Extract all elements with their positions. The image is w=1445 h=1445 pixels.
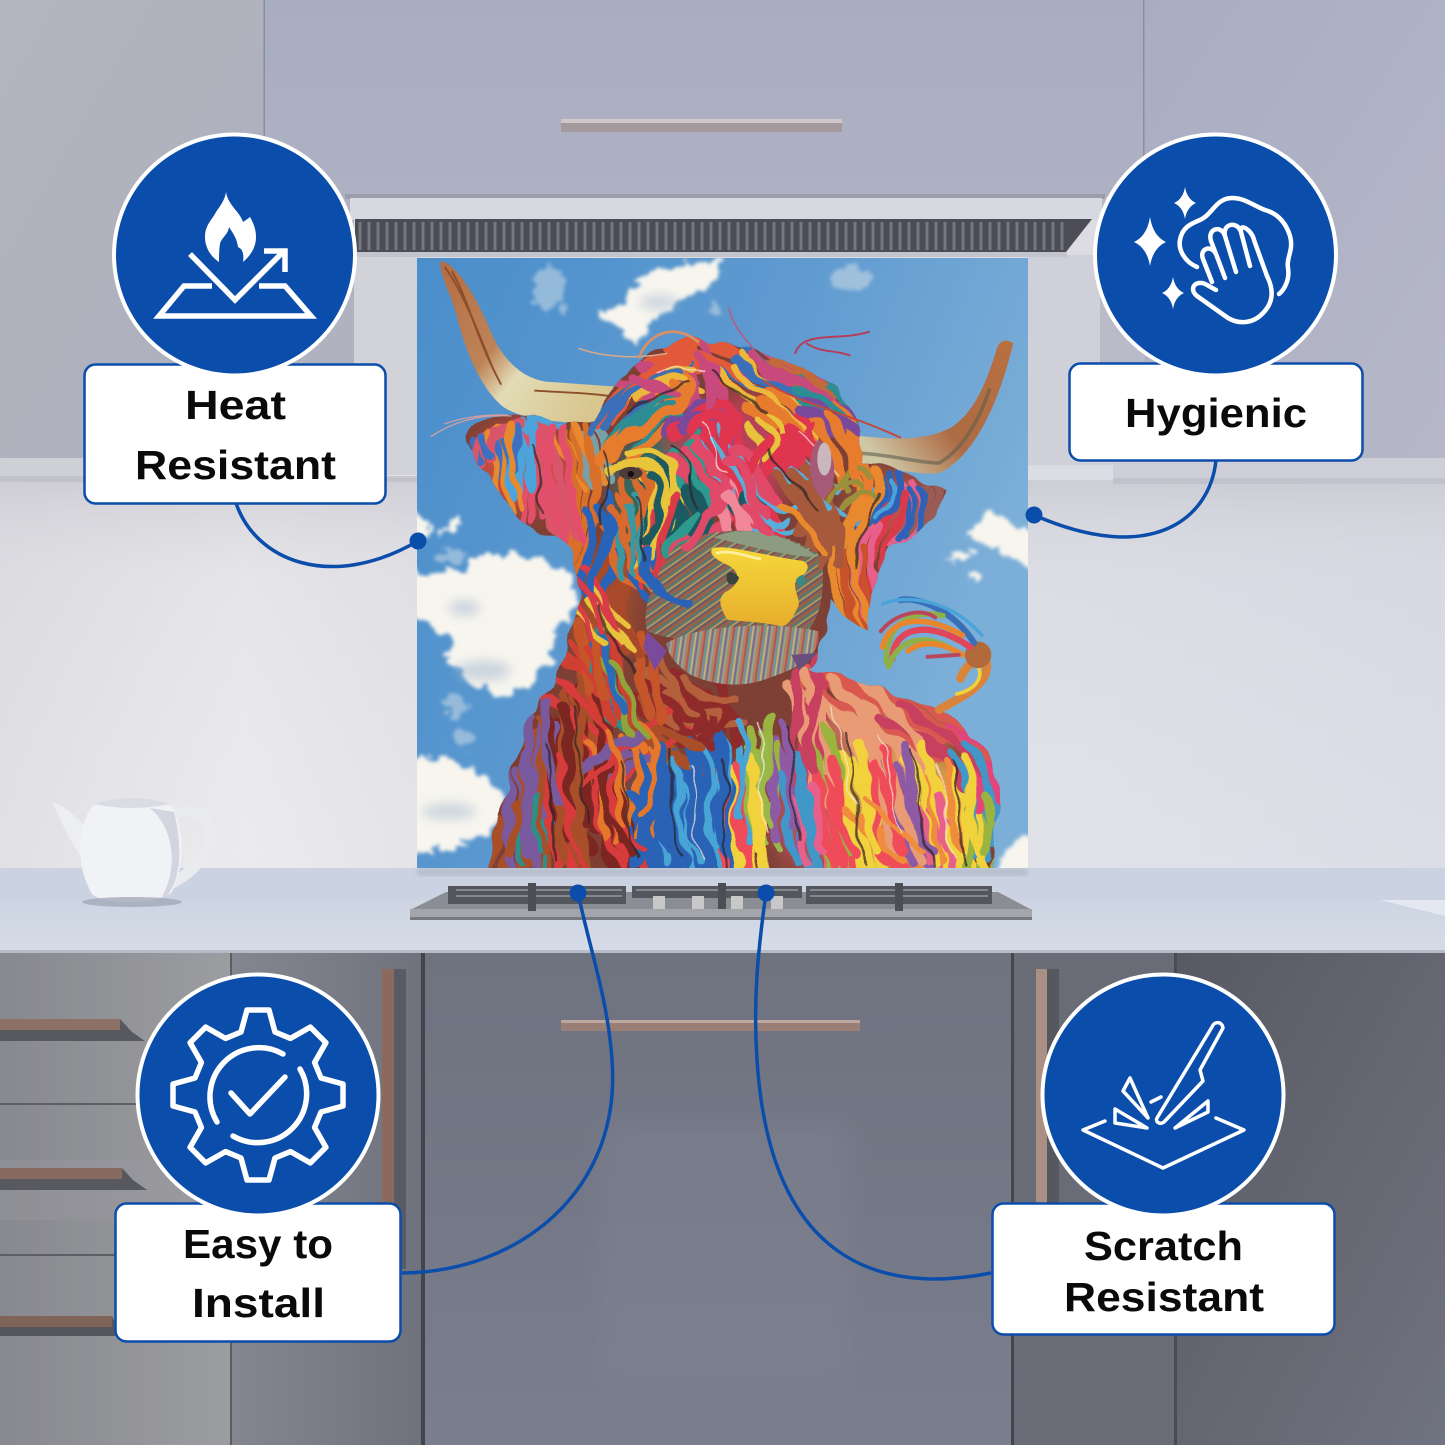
callout: easy to install [116,974,400,1342]
upper cabinets [0,0,1445,484]
icon: flame on surface with arrow [114,134,355,376]
callout: heat resistant [84,134,386,504]
neck ribbons [554,561,651,733]
cow stray hair and tips [431,308,900,438]
label: scratch resistant: Scratch [1084,1223,1243,1269]
light highlight strands [659,367,955,858]
cow muzzle [643,531,823,685]
label: easy to install [116,1204,400,1342]
cabinet handles: lower [0,969,1059,1336]
label: easy to install: Install [192,1280,325,1326]
label: hygienic [1070,364,1362,460]
cow eyes [619,440,834,499]
extractor hood [345,194,1105,257]
head ribbons [577,352,861,639]
clouds [402,259,1040,882]
body ribbons [503,647,993,869]
painting: highland cow glass splashback [402,258,1040,882]
label: easy to install: Easy to [183,1221,333,1267]
cabinet handle [561,119,842,132]
connector: heat resistant [236,503,418,567]
callout: scratch resistant [992,974,1334,1334]
colour masses [472,396,978,878]
counter [0,868,1445,953]
label: heat resistant [84,364,386,504]
dark shadow strands [534,373,966,866]
cooktop [410,883,1032,920]
connector: hygienic [1034,460,1216,537]
label: heat resistant: Resistant [135,442,336,488]
cow tail [881,599,991,710]
teapot [52,798,210,907]
wall [0,258,1445,870]
icon: gear with check mark [138,974,378,1216]
callout: hygienic [1070,134,1362,460]
cow hair mass [456,334,1007,882]
anchor dots [410,506,1042,902]
lower cabinets [0,953,1445,1445]
fringe over muzzle [647,494,825,604]
cow nose [711,547,808,626]
label: heat resistant: Heat [185,382,286,428]
connector: easy to install [402,893,613,1273]
connector: scratch resistant [756,893,991,1279]
icon: hand wiping with sparkles [1095,134,1336,376]
label: scratch resistant: Resistant [1064,1274,1264,1320]
label: scratch resistant [992,1204,1334,1334]
label: hygienic: Hygienic [1125,390,1307,436]
horns [440,261,1013,474]
ear ribbons [472,424,931,631]
icon: knife scratching surface [1042,974,1284,1216]
